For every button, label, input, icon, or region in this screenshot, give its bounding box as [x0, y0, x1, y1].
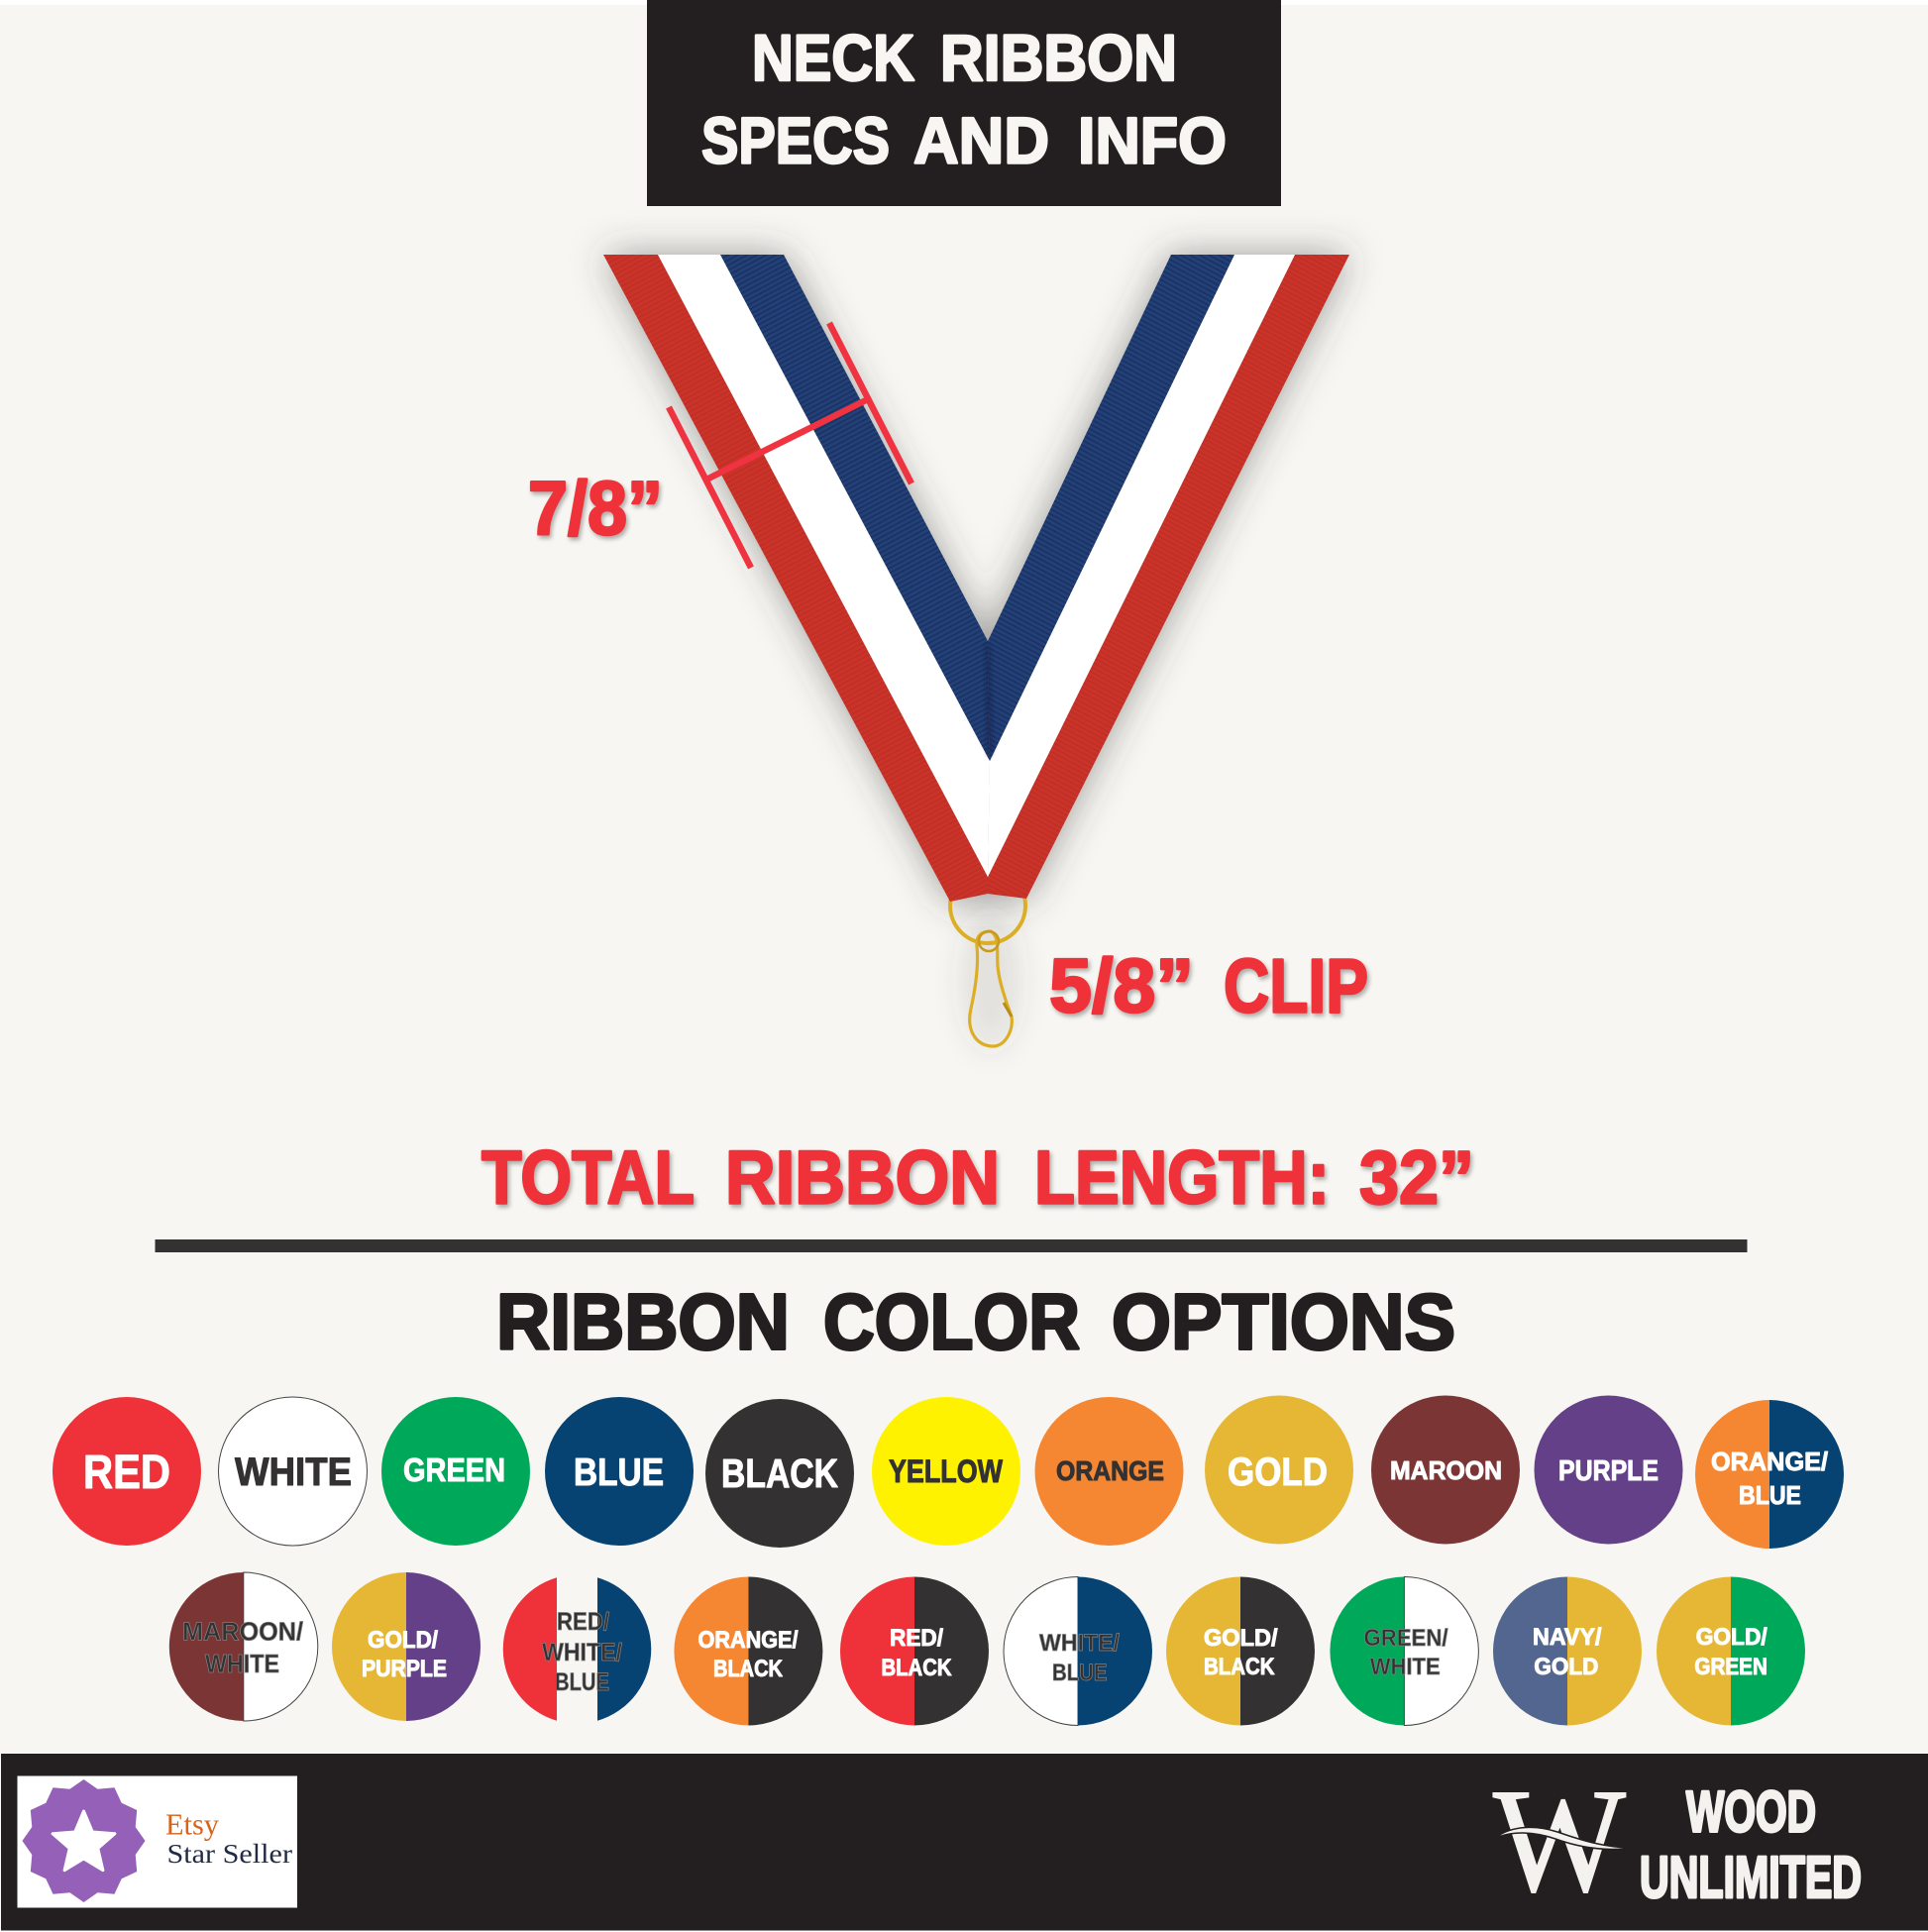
swatch: gold/black: BLACK	[1204, 1654, 1275, 1680]
swatch: orange/black	[674, 1577, 822, 1726]
swatch: green: GREEN	[403, 1452, 505, 1489]
swatch: maroon/white: WHITE	[205, 1649, 279, 1678]
total length label: RIBBON	[725, 1135, 1000, 1221]
star seller label: Star Seller	[166, 1839, 292, 1869]
right arm	[988, 255, 1349, 899]
swatch: orange/blue: ORANGE/	[1711, 1447, 1828, 1476]
swatch: orange: ORANGE	[1056, 1455, 1164, 1486]
total length label: 32”	[1359, 1135, 1474, 1221]
title banner	[647, 0, 1281, 206]
section divider	[155, 1239, 1748, 1252]
total length label: TOTAL	[482, 1135, 695, 1221]
swatch: red/white/blue: RED/	[557, 1608, 609, 1636]
swatch: maroon	[1371, 1395, 1520, 1544]
swatch: red/white/blue	[503, 1577, 651, 1721]
swatch: gold	[1205, 1395, 1353, 1544]
color swatches: row 1	[53, 1395, 1844, 1549]
swatch: green/white	[1330, 1577, 1478, 1726]
color swatches: row 2	[169, 1572, 1805, 1726]
ribbon drop shadow	[603, 255, 1349, 1050]
swatch: navy/gold: GOLD	[1534, 1654, 1598, 1680]
swatch: blue	[545, 1397, 694, 1546]
logo wordmark: WOOD	[1686, 1779, 1816, 1845]
title banner: SPECS	[701, 103, 890, 176]
swatch: orange/blue	[1695, 1400, 1844, 1549]
left arm	[603, 255, 990, 902]
total length label: LENGTH:	[1034, 1135, 1330, 1221]
clip label: 5/8”	[1049, 943, 1194, 1028]
swatch: blue: BLUE	[574, 1451, 664, 1494]
swatch: red/black: RED/	[890, 1625, 943, 1652]
ribbon V	[603, 255, 1349, 902]
swatch: gold/purple	[332, 1572, 481, 1721]
logo mark: W	[1493, 1759, 1626, 1923]
swatch: orange/blue: BLUE	[1739, 1480, 1801, 1510]
width label: 7/8”	[528, 466, 663, 551]
swatch: gold: GOLD	[1228, 1450, 1328, 1494]
swatch: white: WHITE	[235, 1450, 352, 1494]
ribbon centre fold	[988, 644, 990, 755]
swatch: gold/black	[1166, 1577, 1315, 1726]
swatch: yellow: YELLOW	[889, 1453, 1004, 1489]
section heading: COLOR	[823, 1278, 1080, 1365]
clip label	[1049, 943, 1368, 1028]
width measure marker	[669, 323, 911, 568]
swatch: black: BLACK	[721, 1450, 838, 1496]
swatch: red/white/blue: WHITE/	[542, 1639, 622, 1666]
section heading: OPTIONS	[1112, 1278, 1455, 1365]
swatch: orange/black: BLACK	[713, 1656, 784, 1682]
swatch: red/black: BLACK	[882, 1655, 952, 1681]
swatch: gold/purple: PURPLE	[362, 1656, 447, 1682]
swatch: yellow	[872, 1397, 1020, 1546]
swatch: red/black	[840, 1577, 989, 1726]
clip label: CLIP	[1224, 943, 1368, 1028]
swatch: white/blue: WHITE/	[1039, 1630, 1120, 1657]
swatch: green	[381, 1397, 530, 1546]
swatch: purple	[1534, 1395, 1682, 1544]
title banner: INFO	[1078, 103, 1227, 176]
swatch: red: RED	[83, 1447, 170, 1499]
swatch: gold/green	[1657, 1577, 1805, 1726]
swatch: gold/green: GOLD/	[1696, 1624, 1767, 1651]
footer bar	[1, 1754, 1928, 1930]
section heading: RIBBON	[496, 1278, 790, 1365]
swatch: gold/purple: GOLD/	[368, 1627, 438, 1654]
swatch: maroon/white	[169, 1572, 318, 1721]
logo wordmark	[1640, 1779, 1862, 1910]
swatch: maroon: MAROON	[1390, 1455, 1502, 1485]
title banner: RIBBON	[940, 21, 1177, 94]
swatch: gold/green: GREEN	[1694, 1654, 1767, 1680]
swatch: white/blue	[1004, 1577, 1152, 1726]
swatch: orange/black: ORANGE/	[697, 1627, 799, 1654]
swatch: gold/black: GOLD/	[1204, 1625, 1278, 1652]
swatch: maroon/white: MAROON/	[182, 1617, 303, 1647]
title banner: NECK	[752, 21, 914, 94]
title banner: AND	[913, 103, 1049, 176]
swatch: green/white: WHITE	[1370, 1654, 1441, 1680]
icon: purple star seal	[22, 1779, 145, 1902]
swatch: purple: PURPLE	[1558, 1455, 1659, 1487]
swatch: green/white: GREEN/	[1363, 1625, 1448, 1652]
etsy star seller badge	[18, 1775, 297, 1908]
swatch: black	[705, 1399, 854, 1548]
gold clip	[950, 868, 1025, 1046]
wood unlimited logo	[1493, 1759, 1862, 1923]
swatch: red/white/blue: BLUE	[555, 1668, 609, 1696]
section heading	[496, 1278, 1455, 1365]
swatch: navy/gold	[1493, 1577, 1642, 1726]
swatch: orange	[1034, 1397, 1183, 1546]
swatch: navy/gold: NAVY/	[1533, 1624, 1602, 1651]
swatch: white/blue: BLUE	[1052, 1660, 1108, 1686]
swatch: red	[53, 1397, 201, 1546]
etsy label: Etsy	[165, 1807, 219, 1841]
swatch: white	[218, 1397, 367, 1546]
total length label	[482, 1135, 1474, 1221]
